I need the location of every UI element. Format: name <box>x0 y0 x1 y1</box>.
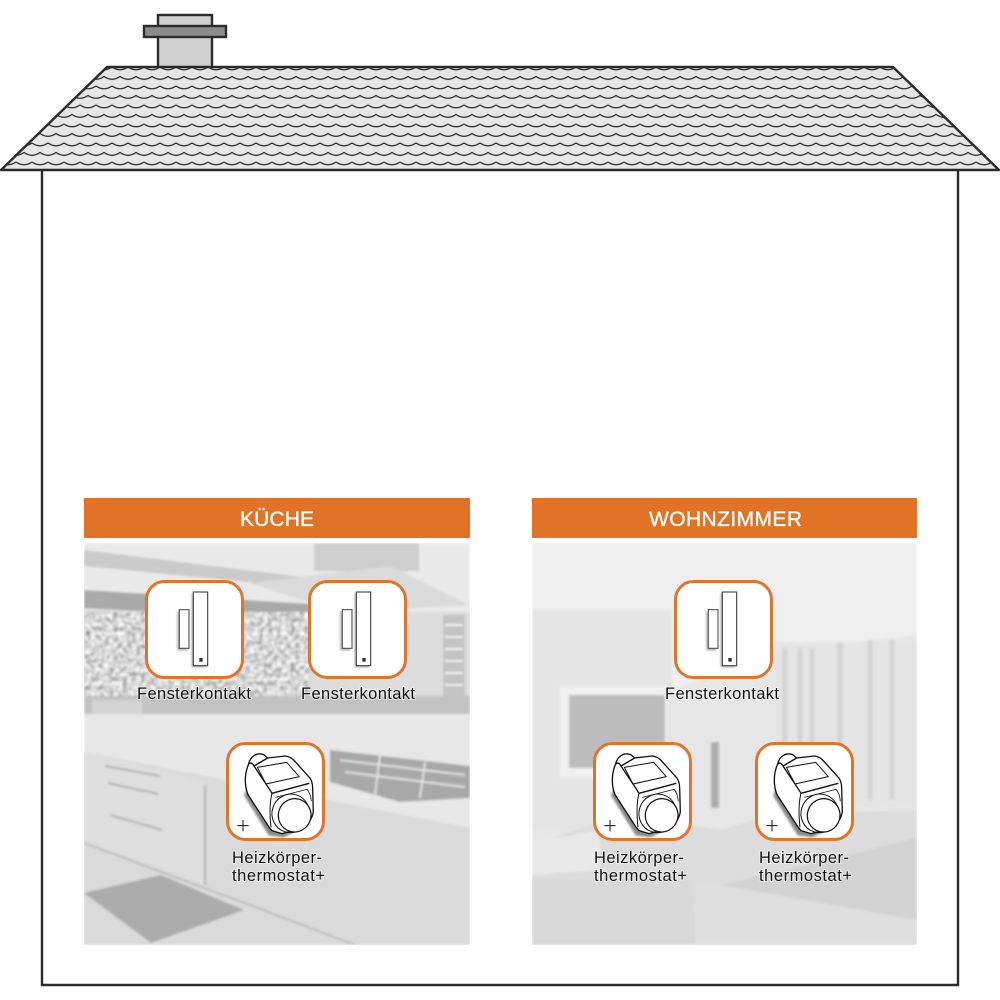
label: Heizkörperthermostat 2 <box>759 849 852 885</box>
label: Heizkörperthermostat: Heizkörper- <box>232 849 322 867</box>
living room photo background <box>532 543 917 945</box>
icon: Fensterkontakt <box>676 582 772 678</box>
icon: Fensterkontakt 2 <box>310 582 406 678</box>
label: Heizkörperthermostat: thermostat+ <box>232 867 325 885</box>
icon: Heizkörperthermostat 1 <box>594 744 690 840</box>
header: Wohnzimmer <box>532 498 917 538</box>
label: Heizkörperthermostat 2: Heizkörper- <box>759 849 849 867</box>
header: Küche <box>84 498 470 538</box>
panel: Küche <box>84 498 470 945</box>
header: Wohnzimmer: WOHNZIMMER <box>649 508 802 531</box>
label: Heizkörperthermostat 2: thermostat+ <box>759 867 852 885</box>
label: Fensterkontakt: Fensterkontakt <box>665 685 779 703</box>
icon: Fensterkontakt 1 <box>146 582 242 678</box>
label: Heizkörperthermostat <box>232 849 325 885</box>
label: Fensterkontakt 1: Fensterkontakt <box>137 685 251 703</box>
label: Heizkörperthermostat 1: thermostat+ <box>594 867 687 885</box>
chimney <box>144 15 226 68</box>
label: Heizkörperthermostat 1: Heizkörper- <box>594 849 684 867</box>
icon: Heizkörperthermostat <box>228 744 324 840</box>
label: Heizkörperthermostat 1 <box>594 849 687 885</box>
icon: Heizkörperthermostat 2 <box>756 744 852 840</box>
house walls <box>42 170 958 985</box>
panel: Wohnzimmer <box>532 498 917 945</box>
roof <box>1 67 999 170</box>
header: Küche: KÜCHE <box>240 508 314 531</box>
label: Fensterkontakt 2: Fensterkontakt <box>301 685 415 703</box>
kitchen photo background <box>84 543 470 945</box>
